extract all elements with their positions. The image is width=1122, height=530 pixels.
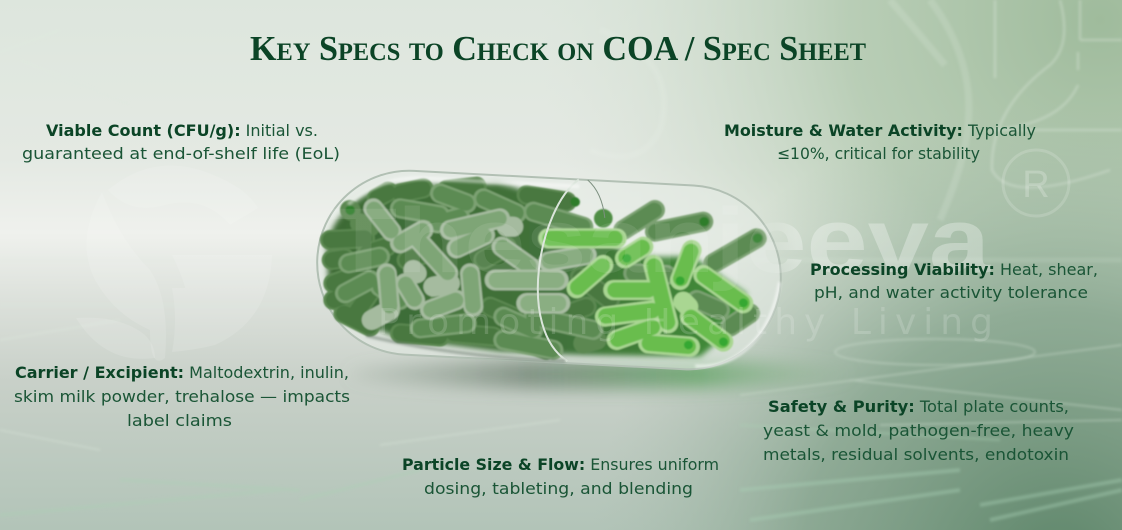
text block: particle size and flow: Particle Size & Flow: Ensures uniform xyxy=(402,455,719,474)
text block: carrier and excipient: label claims xyxy=(127,411,232,430)
text block: moisture and water activity: Moisture & Water Activity: Typically xyxy=(724,121,1036,140)
capsule seam and highlights xyxy=(341,168,784,372)
text block: particle size and flow xyxy=(402,455,719,498)
text block: safety and purity: yeast & mold, pathogen-free, heavy xyxy=(763,421,1074,440)
bright foreground rods xyxy=(548,238,743,347)
capsule xyxy=(313,166,785,374)
text block: carrier and excipient: skim milk powder, trehalose — impacts xyxy=(14,387,350,406)
text block: viable count xyxy=(22,121,340,163)
watermark: brand name: Thesanjeeva xyxy=(330,190,991,292)
text block: viable count: guaranteed at end-of-shelf life (EoL) xyxy=(22,144,340,163)
watermark logo xyxy=(76,166,272,361)
watermark: registered mark: R xyxy=(1022,164,1050,206)
text block: particle size and flow: dosing, tableting, and blending xyxy=(424,479,693,498)
text block: processing viability: Processing Viability: Heat, shear, xyxy=(810,260,1098,279)
text block: processing viability xyxy=(810,260,1098,302)
capsule glass body xyxy=(313,166,785,374)
text block: processing viability: pH, and water activity tolerance xyxy=(814,283,1088,302)
text block: safety and purity xyxy=(763,397,1074,464)
text block: safety and purity: Safety & Purity: Total plate counts, xyxy=(768,397,1069,416)
probiotic rods xyxy=(327,183,758,357)
title: Key Specs to Check on COA / Spec Sheet xyxy=(250,29,866,68)
text block: viable count: Viable Count (CFU/g): Initial vs. xyxy=(46,121,318,140)
text block: carrier and excipient xyxy=(14,363,350,430)
text block: moisture and water activity: ≤10%, critical for stability xyxy=(777,144,980,163)
dark mass xyxy=(327,183,747,357)
watermark: tagline: Promoting Healthy Living xyxy=(378,302,993,343)
text block: moisture and water activity xyxy=(724,121,1036,163)
text block: carrier and excipient: Carrier / Excipient: Maltodextrin, inulin, xyxy=(15,363,349,382)
shadow under capsule xyxy=(350,359,850,389)
watermark: registered mark xyxy=(1003,150,1069,216)
text block: safety and purity: metals, residual solvents, endotoxin xyxy=(763,445,1069,464)
